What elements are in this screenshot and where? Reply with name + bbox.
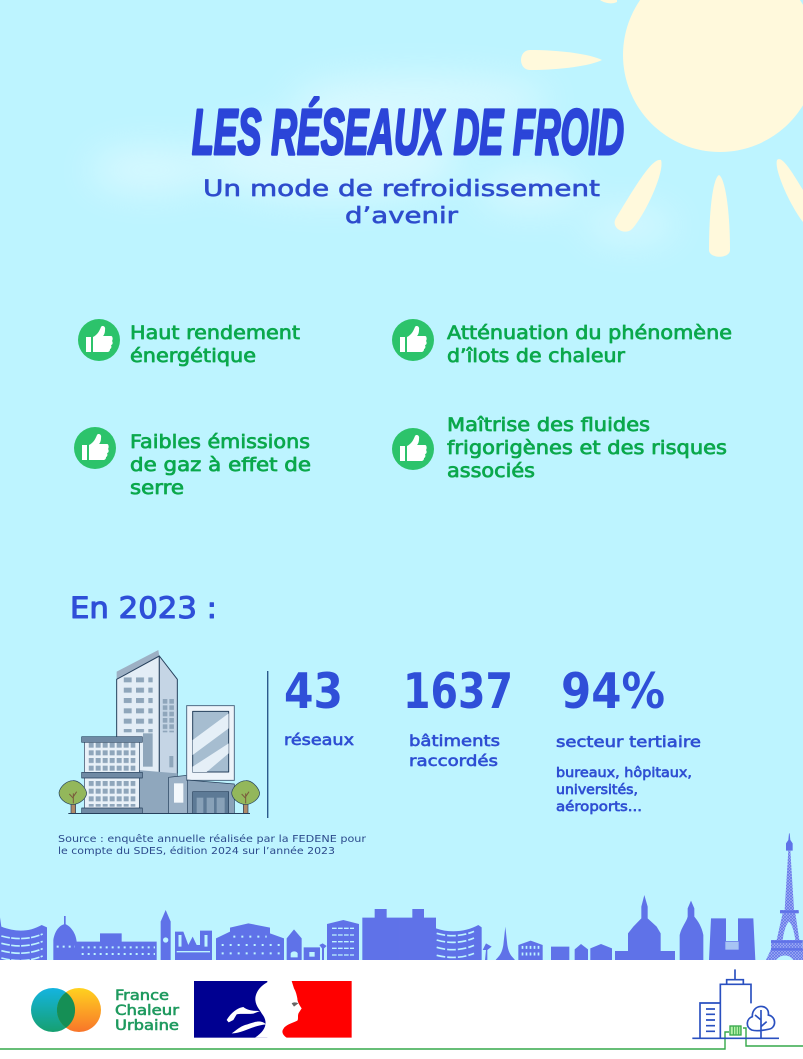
text [447,414,727,482]
subtitle [203,177,600,229]
stat: 94% tertiaire: aéroports... [556,800,642,815]
icon: building and tree [692,969,779,1038]
eiffel tower [766,833,803,960]
logo: France Chaleur Urbaine: France [115,988,169,1004]
heading: en 2023: En 2023 : [70,591,217,625]
logo: France Chaleur Urbaine [31,988,179,1034]
subtitle: d’avenir [345,204,459,229]
text: serre [130,477,184,499]
stat: 94% tertiaire [556,663,701,815]
footer [0,960,803,1059]
green network line [0,1028,803,1049]
text: Maîtrise des fluides [447,414,650,436]
subtitle: Un mode de refroidissement [203,177,600,202]
skyline [0,895,755,961]
text [447,322,732,367]
text: énergétique [130,345,256,367]
icon: thumbs up [392,428,434,470]
text [130,431,311,499]
benefit: haut rendement [78,319,300,367]
stat: 43 réseaux: 43 [284,663,343,720]
stat: 1637 bâtiments: raccordés [409,752,498,770]
text: Haut rendement [130,322,300,344]
illustration: buildings [59,650,260,814]
divider [267,671,268,818]
text: Atténuation du phénomène [447,322,732,344]
stat: 94% tertiaire: universités, [556,783,638,798]
stat: 1637 bâtiments [403,663,513,770]
logo: France Chaleur Urbaine: Chaleur [115,1003,179,1019]
icon: thumbs up [74,427,116,469]
text [130,322,300,367]
stat: 94% tertiaire: bureaux, hôpitaux, [556,766,692,781]
source [58,833,367,857]
text: associés [447,460,535,482]
text: Faibles émissions [130,431,310,453]
clouds [90,76,675,241]
stat: 1637 bâtiments: bâtiments [409,732,500,750]
stat: 94% tertiaire: secteur tertiaire [556,733,701,751]
benefit: atténuation [392,319,732,367]
benefit: faibles émissions [74,427,311,499]
stat: 94% tertiaire: 94% [561,663,665,720]
logo: France Chaleur Urbaine: Urbaine [115,1018,179,1034]
text: de gaz à effet de [130,454,311,476]
tree right [232,781,260,813]
benefit: maîtrise [392,414,727,482]
icon: thumbs up [392,319,434,361]
icon: thumbs up [78,319,120,361]
source: le compte du SDES, édition 2024 sur l’année 2023 [58,845,335,857]
logo: Marianne [194,981,352,1038]
tree left [59,781,87,813]
stat: 43 réseaux: réseaux [284,731,354,749]
text: d’îlots de chaleur [447,345,625,367]
source: Source : enquête annuelle réalisée par la FEDENE pour [58,833,367,845]
stat: 1637 bâtiments: 1637 [403,663,513,720]
stat: 43 réseaux [284,663,354,749]
sun [521,0,803,257]
text: frigorigènes et des risques [447,437,727,459]
